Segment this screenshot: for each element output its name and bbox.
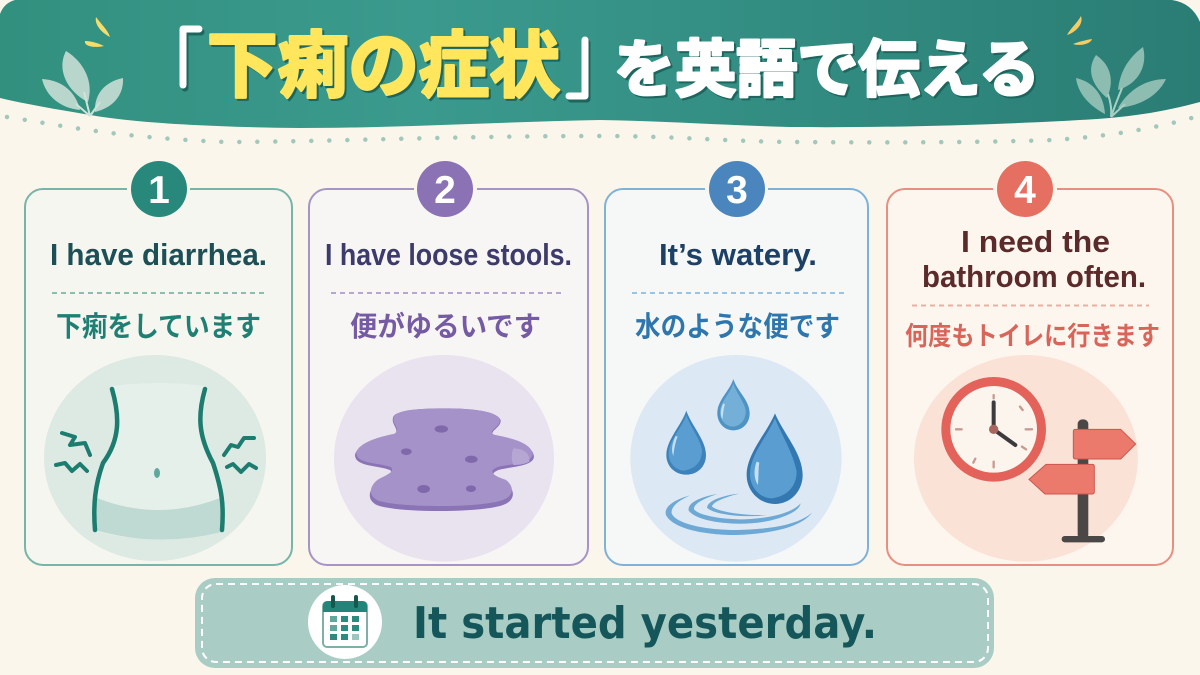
callout: it started yesterday xyxy=(195,578,994,668)
title: を英語で伝える xyxy=(614,36,1040,105)
japanese phrase 1: 下痢をしています xyxy=(56,311,261,342)
icon: left leaves xyxy=(42,17,123,116)
badge 2: 2 xyxy=(434,169,456,212)
icon: clock and signpost xyxy=(914,355,1138,562)
badge 3: 3 xyxy=(726,169,748,212)
icon: puddle xyxy=(334,355,554,562)
english phrase 2: I have loose stools. xyxy=(325,237,572,272)
japanese phrase 4: 何度もトイレに行きます xyxy=(905,321,1160,351)
badge 2 xyxy=(417,161,473,217)
english phrase 4: bathroom often. xyxy=(922,259,1146,294)
icon: abdomen xyxy=(44,355,266,561)
japanese phrase 2: 便がゆるいです xyxy=(350,310,541,342)
icon: right leaves xyxy=(1067,16,1166,117)
panel: card 4 xyxy=(887,161,1173,565)
title xyxy=(183,27,1040,107)
panel: card 2 xyxy=(309,161,588,565)
badge 1: 1 xyxy=(148,169,170,212)
header banner xyxy=(0,0,1200,128)
badge 3 xyxy=(709,161,765,217)
badge 4 xyxy=(997,161,1053,217)
title: 下痢の症状 xyxy=(207,27,560,107)
callout text: It started yesterday. xyxy=(413,598,877,649)
icon: water drops xyxy=(630,355,842,562)
japanese phrase 3: 水のような便です xyxy=(635,311,840,342)
dotted line under header xyxy=(7,117,1195,142)
english phrase 4: I need the xyxy=(961,224,1110,259)
badge 4: 4 xyxy=(1014,169,1036,212)
panel: card 3 xyxy=(605,161,868,565)
english phrase 3: It’s watery. xyxy=(659,237,817,272)
english phrase 4 xyxy=(922,224,1146,294)
english phrase 1: I have diarrhea. xyxy=(50,237,267,272)
icon: calendar xyxy=(308,585,382,659)
panel: card 1 xyxy=(25,161,292,565)
badge 1 xyxy=(131,161,187,217)
